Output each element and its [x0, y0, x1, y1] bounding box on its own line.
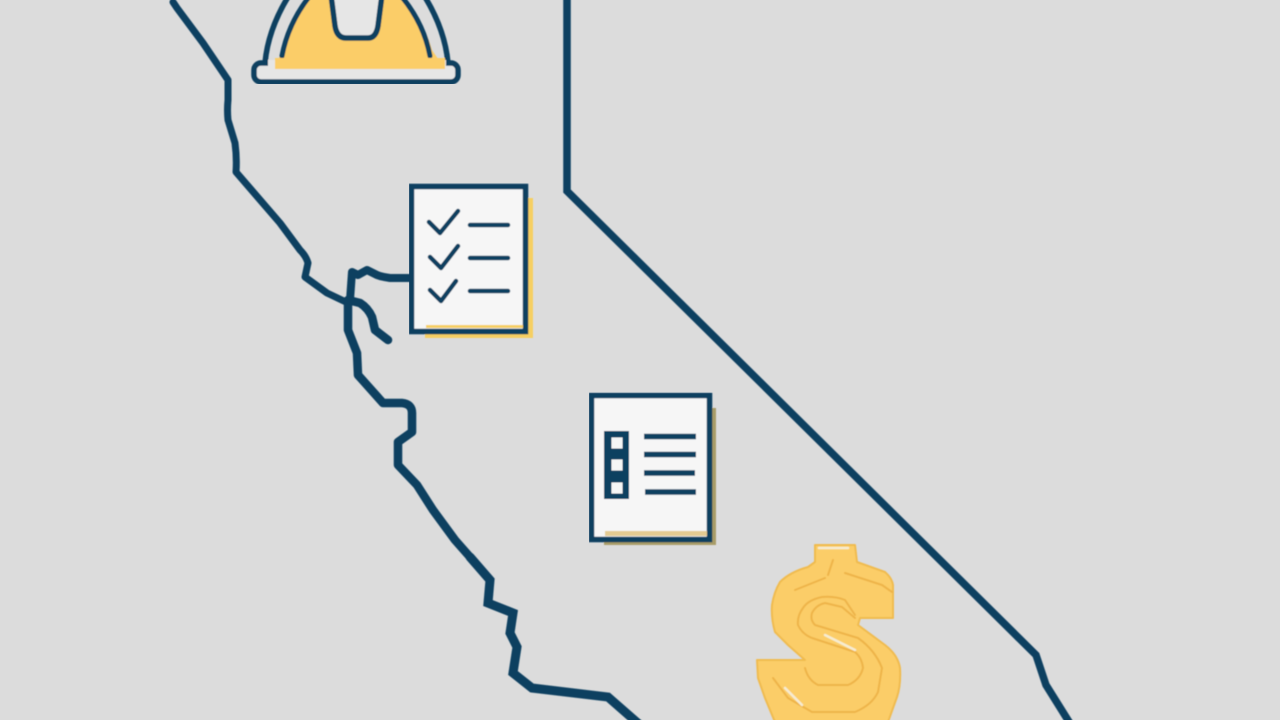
- list document page: [592, 396, 710, 540]
- coastline south: [470, 557, 640, 720]
- checklist yellow inner strip: [426, 325, 523, 328]
- checklist page: [412, 186, 526, 332]
- list bullet column: [604, 431, 629, 499]
- hat yellow band: [275, 58, 445, 69]
- checklist yellow shadow: [425, 198, 533, 338]
- hat yellow dome: [275, 0, 445, 69]
- eastern border: [567, 0, 1071, 720]
- list tan strip: [605, 531, 707, 536]
- icon: checklist document: [412, 186, 533, 338]
- dollar highlights: [785, 548, 855, 705]
- coastline north: [173, 2, 348, 303]
- dollar inner contours: [798, 597, 863, 685]
- hat outer arc: [265, 0, 448, 63]
- list document shadow: [604, 408, 716, 545]
- hat inner arc: [282, 0, 430, 56]
- dollar silhouette: [757, 545, 900, 720]
- checklist marks and lines: [429, 211, 508, 301]
- hat brim: [254, 63, 458, 82]
- dollar outer contours: [773, 560, 892, 712]
- hat center slot: [331, 0, 382, 38]
- icon: dollar sign: [757, 545, 900, 720]
- map: California outline: [173, 0, 1071, 720]
- connector from bay to checklist: [350, 270, 410, 300]
- list lines: [644, 436, 696, 492]
- icon: hard hat: [254, 0, 458, 82]
- hat brim opening: [268, 60, 446, 66]
- coastline central: [348, 303, 470, 557]
- bay inlet: [348, 300, 388, 340]
- icon: list document: [592, 396, 716, 545]
